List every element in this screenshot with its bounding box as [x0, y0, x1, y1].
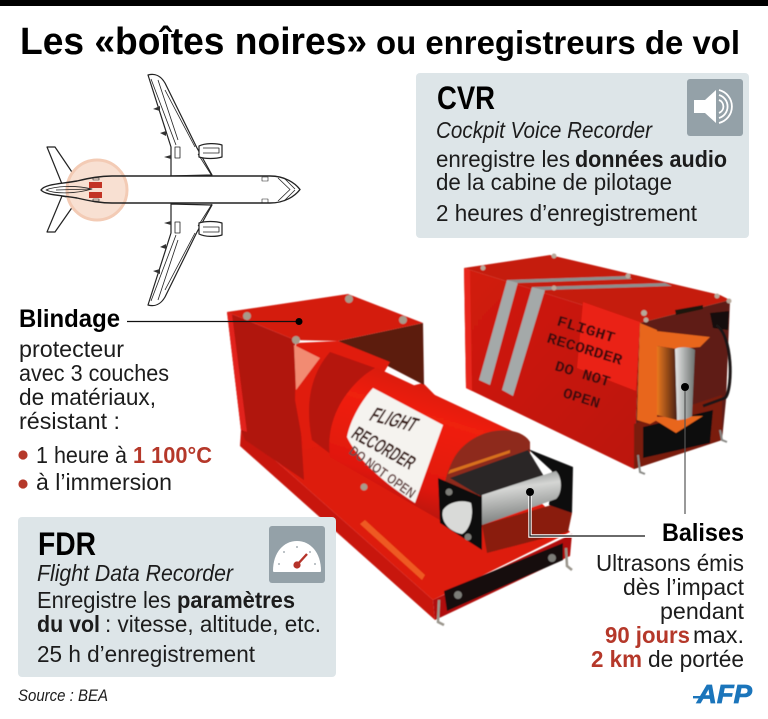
box top face [227, 294, 423, 341]
black compartment [643, 410, 713, 458]
panel: CVR: de la cabine de pilotage [436, 169, 672, 195]
text block: Blindage: résistant : [19, 408, 120, 434]
lighter square [577, 302, 640, 391]
text block: Balises: 90 jours [605, 622, 690, 648]
text block: Balises: Balises [662, 519, 744, 547]
front dark face [634, 300, 730, 469]
title: ou enregistreurs de vol [376, 24, 740, 61]
panel: CVR: données audio [575, 146, 727, 172]
text block: Balises: de portée [648, 646, 744, 672]
text block: Balises: pendant [660, 598, 745, 624]
icon: gauge [269, 526, 325, 583]
panel: FDR: Flight Data Recorder [37, 560, 234, 586]
callout line: Balises FDR [526, 488, 645, 536]
recorders on plane [89, 182, 102, 198]
text block: Blindage: Blindage [19, 305, 120, 333]
panel: FDR: paramètres [177, 587, 295, 613]
text block: Balises: dès l’impact [623, 574, 745, 600]
casing text: FLIGHT [555, 314, 617, 347]
panel: CVR: Cockpit Voice Recorder [436, 117, 653, 143]
text block: Balises: 2 km [591, 646, 642, 672]
frame back wall [450, 450, 545, 497]
panel: FDR: du vol [37, 611, 100, 637]
cylinder end [443, 430, 530, 500]
base top [241, 383, 570, 600]
text block: Blindage: de matériaux, [19, 384, 156, 410]
bullet: immersion: à l’immersion [36, 469, 172, 495]
base front [433, 534, 572, 620]
panel: CVR [416, 73, 749, 238]
callout line: Blindage [127, 318, 302, 325]
top face [464, 255, 730, 323]
FDR recorder illustration [227, 294, 573, 625]
grey stripes [479, 276, 672, 396]
panel: FDR: Enregistre les [37, 587, 171, 613]
label text: FLIGHT [365, 404, 423, 436]
bolts [243, 295, 407, 490]
box inner dark face [338, 323, 424, 385]
bottom wing [148, 204, 222, 306]
bullet: temperature [18, 442, 212, 468]
text block: Balises: max. [693, 622, 744, 648]
panel: FDR [18, 517, 336, 677]
left face [464, 268, 640, 469]
text block: Blindage [18, 305, 212, 495]
tail fins [47, 147, 78, 232]
panel: CVR: CVR [437, 80, 495, 116]
white label [347, 388, 443, 503]
battery [482, 471, 561, 525]
frame interior [657, 346, 677, 420]
panel: CVR: enregistre les [436, 146, 570, 172]
CVR recorder illustration [464, 254, 732, 474]
title [20, 21, 740, 63]
bolts [480, 254, 732, 322]
text block: Balises [591, 519, 745, 672]
feet [438, 548, 572, 625]
beacon [675, 347, 695, 420]
bullet: temperature: 1 heure à [36, 442, 127, 468]
casing text [545, 314, 624, 413]
panel: FDR: 25 h d’enregistrement [37, 641, 256, 667]
battery cap [442, 501, 472, 534]
top black bar [0, 0, 768, 6]
callout line: Balises CVR [681, 383, 689, 514]
frame left plate [438, 478, 482, 550]
AFP logo: AFP [696, 679, 753, 709]
casing text: DO NOT [553, 359, 612, 391]
text block: Blindage: protecteur [19, 336, 124, 362]
panel: CVR: 2 heures d’enregistrement [436, 200, 698, 226]
box left face [227, 312, 304, 480]
handle [703, 325, 730, 406]
frame right plate [528, 449, 573, 513]
text block: Balises: Ultrasons émis [596, 550, 744, 576]
text block: Blindage: avec 3 couches [19, 360, 169, 386]
label text: RECORDER [347, 423, 420, 474]
title: Les «boîtes noires» [20, 21, 367, 63]
orange beacon frame [637, 323, 710, 433]
casing text: OPEN [561, 386, 602, 413]
airplane diagram [41, 74, 300, 306]
label text: DO NOT OPEN [346, 442, 419, 501]
casing text: RECORDER [545, 331, 624, 370]
label text [346, 404, 423, 501]
lower red rim [634, 395, 722, 469]
panel: FDR: FDR [38, 526, 96, 562]
panel: FDR: : vitesse, altitude, etc. [105, 611, 321, 637]
icon: speaker [687, 79, 743, 136]
top wing [148, 74, 222, 176]
bullet: temperature: 1 100°C [133, 442, 212, 468]
shadow under battery [482, 504, 572, 553]
source: Source : BEA [18, 686, 108, 705]
highlight circle [67, 160, 127, 220]
fuselage [41, 176, 300, 203]
base left side [240, 430, 435, 620]
neck [295, 341, 390, 450]
main cylinder [329, 368, 530, 520]
fuselage outline [41, 176, 300, 203]
